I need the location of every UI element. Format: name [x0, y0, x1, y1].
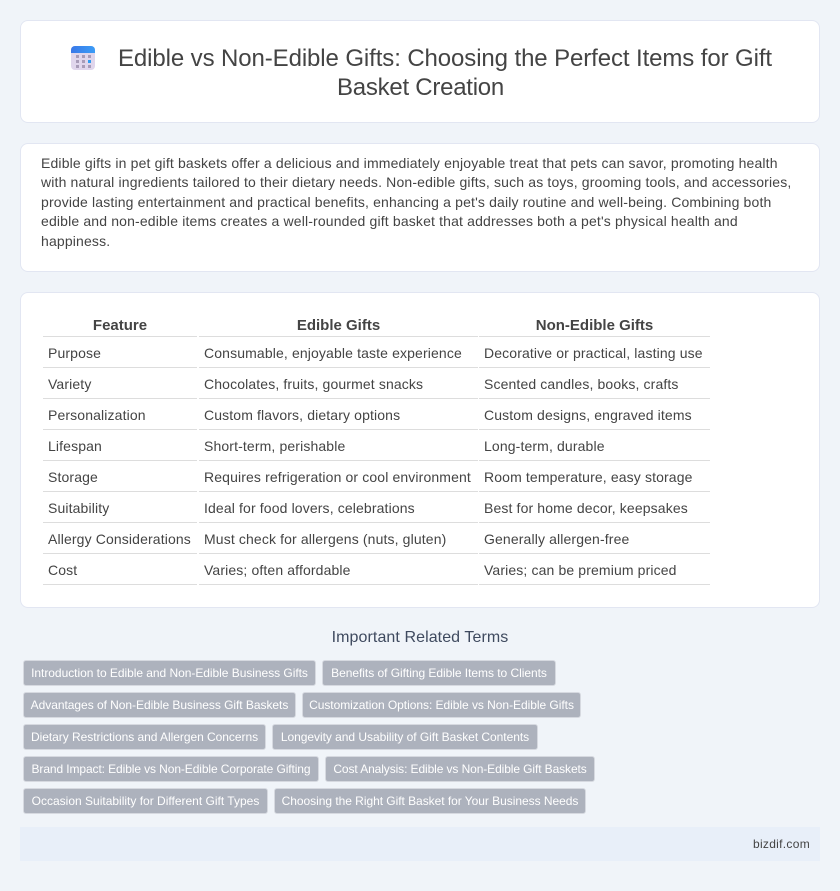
related term chips: Advantages of Non-Edible Business Gift Baskets — [31, 698, 288, 712]
comparison table — [43, 317, 710, 585]
related term chips: Benefits of Gifting Edible Items to Clients — [331, 666, 547, 680]
related term chips: Choosing the Right Gift Basket for Your Business Needs — [282, 794, 578, 808]
comparison table: Variety — [48, 376, 91, 392]
text block: intro: Edible gifts in pet gift baskets offer a delicious and immediately enjoyable treat that pets can savor, promoting health — [41, 155, 778, 171]
footer text: bizdif.com — [753, 837, 810, 851]
related term chips: Longevity and Usability of Gift Basket Contents — [281, 730, 529, 744]
comparison table: Varies; often affordable — [204, 562, 351, 578]
comparison table: Requires refrigeration or cool environment — [204, 469, 471, 485]
comparison table: Long-term, durable — [484, 438, 605, 454]
related term chips: Customization Options: Edible vs Non-Edible Gifts — [309, 698, 574, 712]
text block: intro: with natural ingredients tailored to their dietary needs. Non-edible gifts, such as toys, grooming tools, and accessories, — [41, 174, 791, 190]
comparison table: Custom designs, engraved items — [484, 407, 692, 423]
comparison table: Generally allergen-free — [484, 531, 629, 547]
comparison table: Chocolates, fruits, gourmet snacks — [204, 376, 423, 392]
panel: title card — [20, 20, 820, 123]
text block: intro: edible and non-edible items creates a well-rounded gift basket that addresses both a pet's physical health and — [41, 213, 738, 229]
related term chips — [23, 660, 595, 814]
title: Basket Creation — [337, 74, 504, 101]
comparison table: Short-term, perishable — [204, 438, 345, 454]
comparison table: Allergy Considerations — [48, 531, 191, 547]
comparison table: Edible Gifts — [297, 317, 380, 334]
related term chips: Occasion Suitability for Different Gift Types — [32, 794, 259, 808]
comparison table: Non-Edible Gifts — [536, 317, 653, 334]
comparison table: Must check for allergens (nuts, gluten) — [204, 531, 446, 547]
comparison table: Suitability — [48, 500, 109, 516]
related term chips: Dietary Restrictions and Allergen Concerns — [31, 730, 258, 744]
panel: comparison table card — [20, 292, 820, 608]
comparison table: Purpose — [48, 345, 101, 361]
comparison table: Custom flavors, dietary options — [204, 407, 400, 423]
panel: intro text card — [20, 143, 820, 272]
comparison table: Storage — [48, 469, 98, 485]
related term chips: Brand Impact: Edible vs Non-Edible Corporate Gifting — [32, 762, 310, 776]
title — [118, 45, 772, 101]
comparison table: Varies; can be premium priced — [484, 562, 677, 578]
comparison table: Ideal for food lovers, celebrations — [204, 500, 415, 516]
text block: intro: provide lasting entertainment and practical benefits, enhancing a pet's daily routine and well-being. Combining both — [41, 194, 771, 210]
text block: intro: happiness. — [41, 233, 110, 249]
comparison table: Personalization — [48, 407, 146, 423]
comparison table: Best for home decor, keepsakes — [484, 500, 688, 516]
comparison table: Scented candles, books, crafts — [484, 376, 679, 392]
comparison table: Lifespan — [48, 438, 102, 454]
comparison table: Feature — [93, 317, 147, 334]
heading: related terms: Important Related Terms — [332, 629, 508, 646]
comparison table: Cost — [48, 562, 77, 578]
title: Edible vs Non-Edible Gifts: Choosing the Perfect Items for Gift — [118, 45, 772, 72]
comparison table: Consumable, enjoyable taste experience — [204, 345, 462, 361]
text block: intro — [41, 155, 791, 249]
icon: calendar — [71, 46, 95, 70]
related term chips: Introduction to Edible and Non-Edible Business Gifts — [31, 666, 308, 680]
footer bar — [20, 827, 820, 861]
comparison table: Decorative or practical, lasting use — [484, 345, 703, 361]
comparison table: Room temperature, easy storage — [484, 469, 693, 485]
related term chips: Cost Analysis: Edible vs Non-Edible Gift Baskets — [333, 762, 587, 776]
